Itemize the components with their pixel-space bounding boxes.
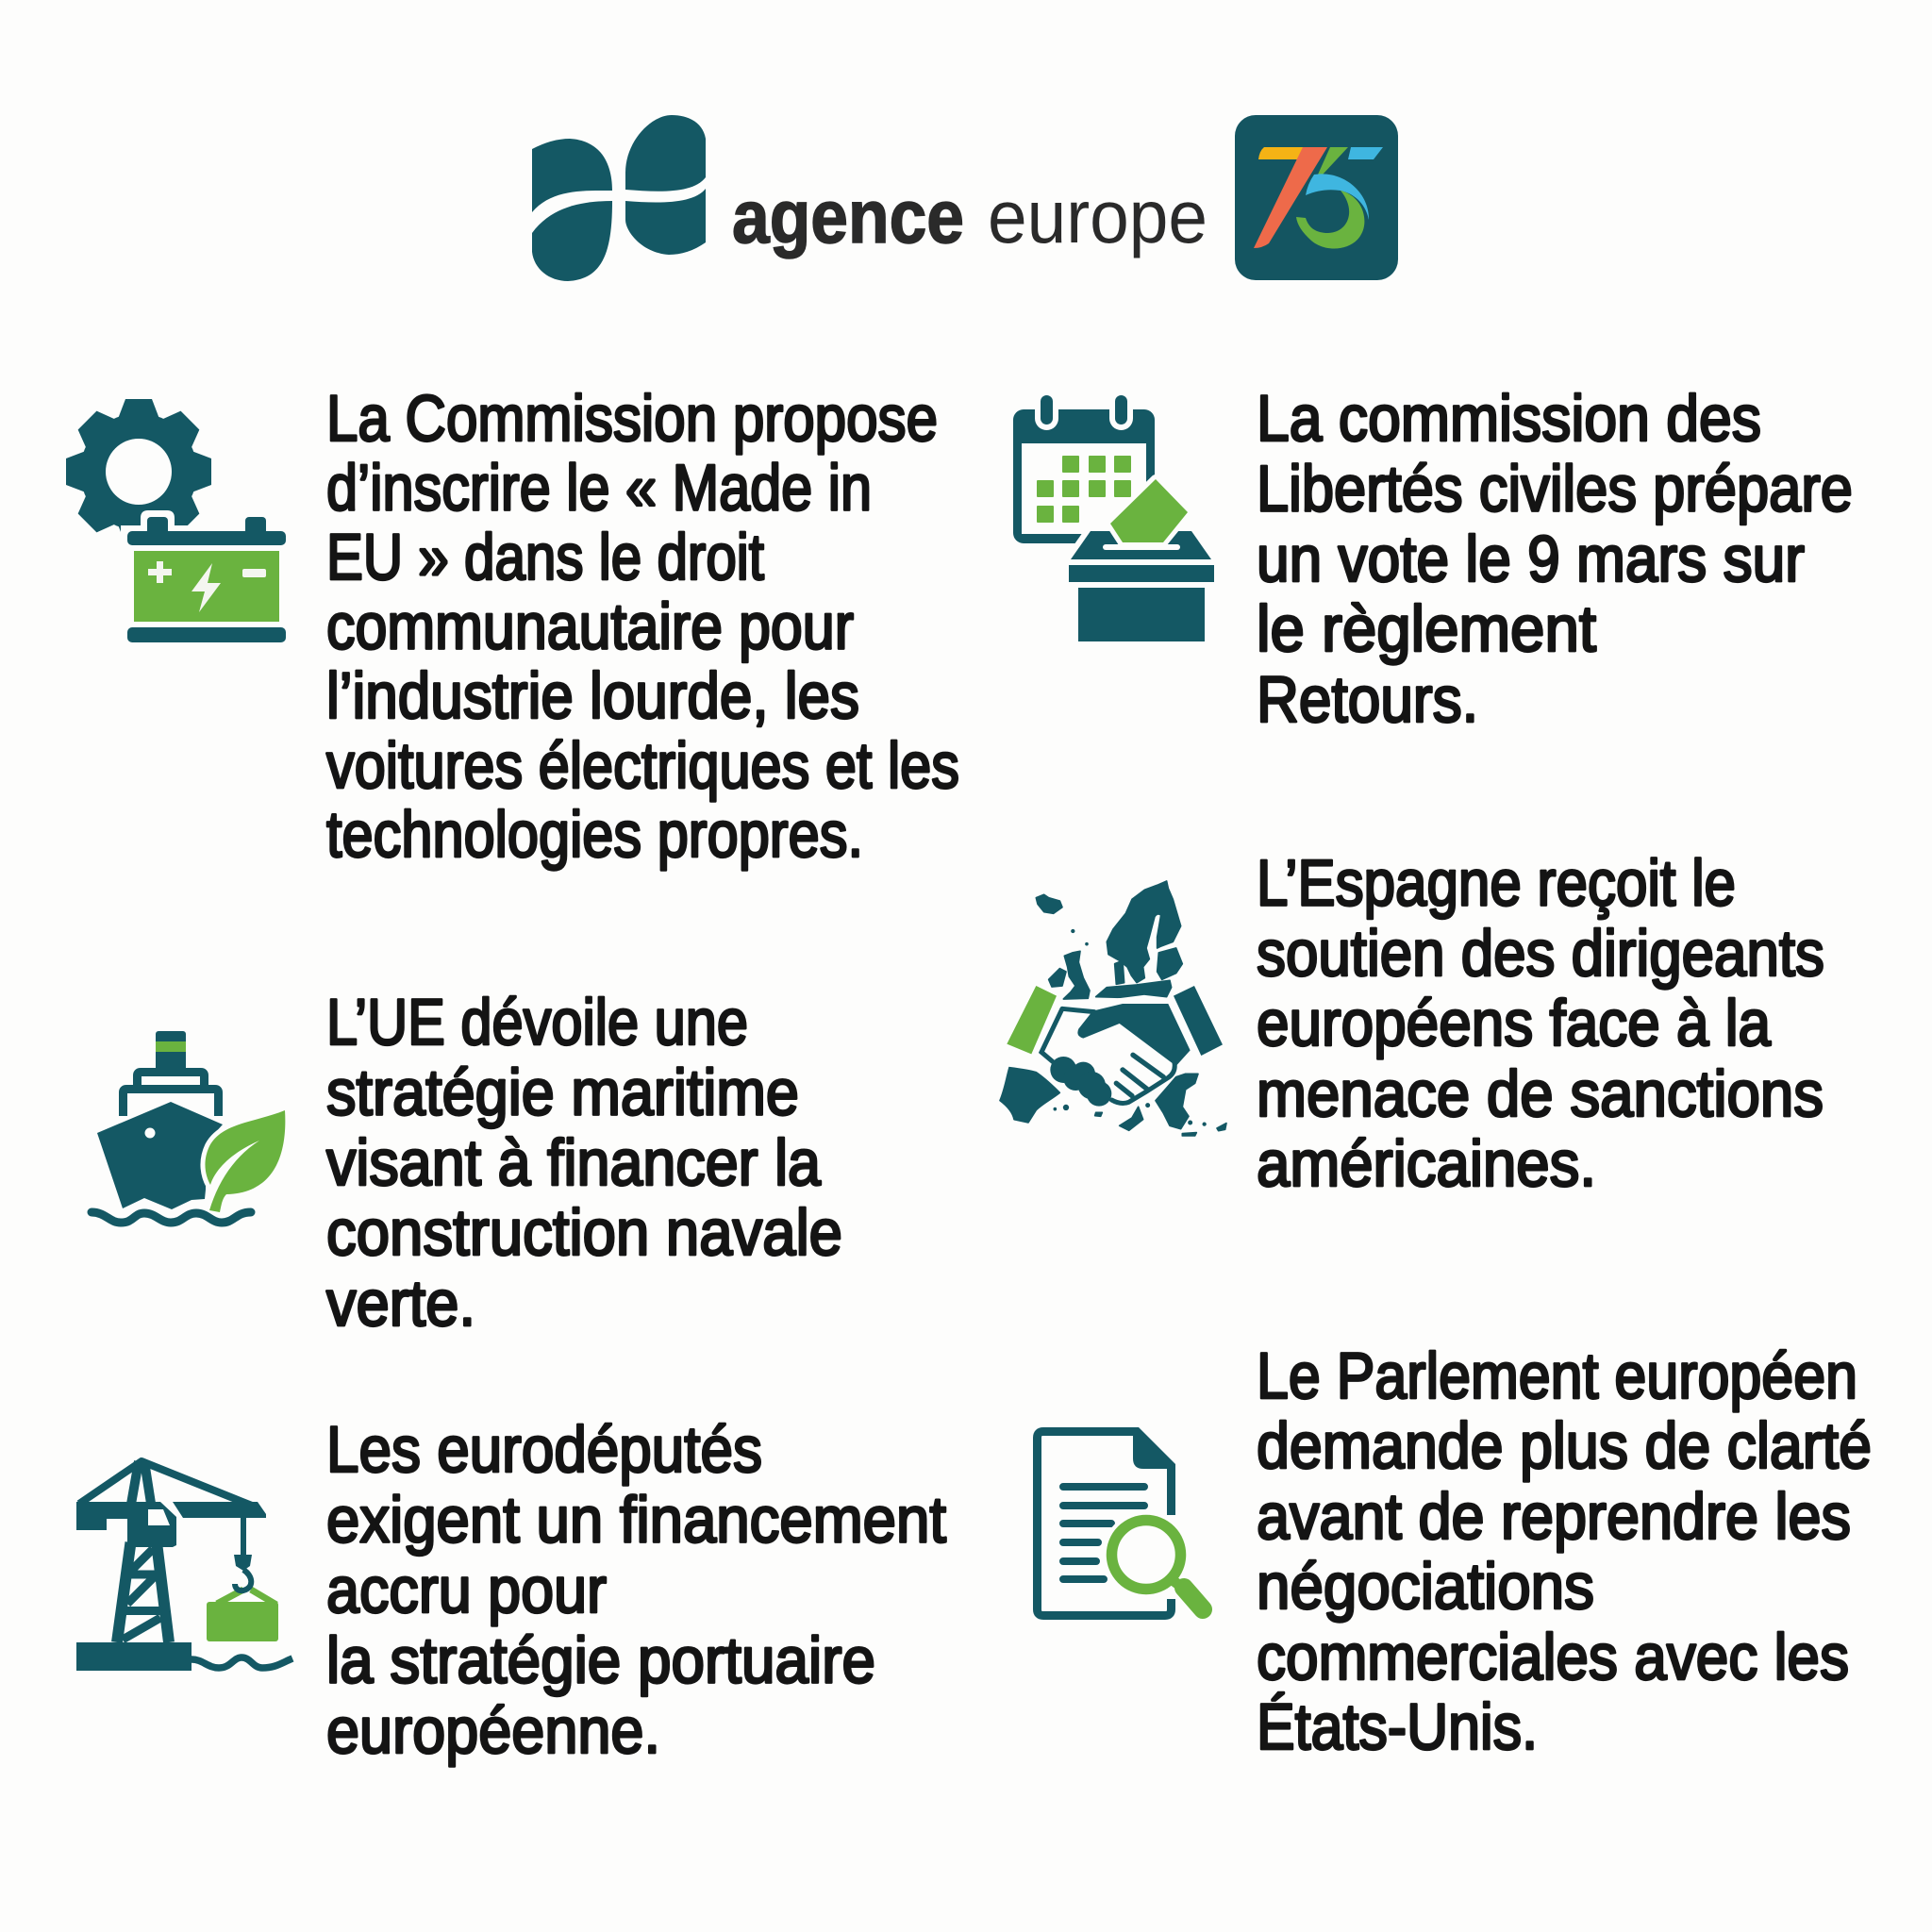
- text: EU-US trade talks: demande plus de clarté: [1257, 1409, 1872, 1482]
- text: EU-US trade talks: commerciales avec les: [1257, 1621, 1849, 1693]
- text: maritime strategy: [326, 986, 842, 1340]
- icon: Europe map with handshake: [1000, 881, 1226, 1136]
- ballot box: [1069, 479, 1214, 641]
- text: EU-US trade talks: avant de reprendre les: [1257, 1480, 1851, 1553]
- text: maritime strategy: L’UE dévoile une: [326, 986, 748, 1058]
- icon: calendar and ballot box: [1013, 390, 1214, 641]
- text: maritime strategy: construction navale: [326, 1196, 842, 1269]
- text: Made in EU: communautaire pour: [326, 591, 854, 662]
- text: maritime strategy: verte.: [326, 1267, 475, 1340]
- icon: document with magnifier: [1038, 1427, 1203, 1615]
- text: EU-US trade talks: [1257, 1340, 1872, 1763]
- text: port strategy: accru pour: [326, 1554, 607, 1626]
- 75th anniversary badge: [1235, 115, 1398, 280]
- logo mark: [532, 115, 706, 281]
- text: Made in EU: l’industrie lourde, les: [326, 659, 859, 732]
- text: port strategy: Les eurodéputés: [326, 1413, 762, 1486]
- text: Returns regulation vote: le règlement: [1257, 592, 1596, 665]
- wordmark: [732, 175, 1208, 258]
- gear: [66, 399, 211, 544]
- text: Spain support: soutien des dirigeants: [1257, 917, 1824, 990]
- map of Europe: [1000, 881, 1226, 1136]
- cuffs: [1007, 986, 1057, 1054]
- text: EU-US trade talks: Le Parlement européen: [1257, 1340, 1857, 1412]
- text: Spain support: américaines.: [1257, 1127, 1596, 1200]
- text: Made in EU: EU » dans le droit: [326, 521, 764, 593]
- calendar: [1013, 390, 1155, 543]
- clasped hands: [1040, 1002, 1191, 1107]
- header logo: [532, 115, 1398, 281]
- text: port strategy: exigent un financement: [326, 1484, 946, 1557]
- text: Returns regulation vote: un vote le 9 mars sur: [1257, 523, 1805, 595]
- icon: port crane: [76, 1461, 292, 1671]
- text: Returns regulation vote: Retours.: [1257, 663, 1478, 736]
- text: EU-US trade talks: États-Unis.: [1257, 1690, 1538, 1763]
- text: EU-US trade talks: négociations: [1257, 1550, 1594, 1623]
- text: Returns regulation vote: [1257, 382, 1853, 736]
- text: port strategy: européenne.: [326, 1694, 660, 1767]
- wordmark: agence: [732, 175, 964, 258]
- battery: [127, 517, 286, 642]
- text: Spain support: menace de sanctions: [1257, 1058, 1824, 1130]
- magnifier: [1111, 1521, 1203, 1609]
- text: maritime strategy: stratégie maritime: [326, 1057, 799, 1128]
- text: Made in EU: d’inscrire le « Made in: [326, 451, 872, 525]
- text: Spain support: L’Espagne reçoit le: [1257, 847, 1736, 919]
- text: Made in EU: technologies propres.: [326, 798, 863, 871]
- text: Made in EU: [326, 382, 959, 871]
- text: port strategy: la stratégie portuaire: [326, 1624, 875, 1696]
- text: Spain support: [1257, 847, 1824, 1200]
- text: maritime strategy: visant à financer la: [326, 1126, 822, 1199]
- text: Returns regulation vote: La commission des: [1257, 382, 1761, 455]
- text: Returns regulation vote: Libertés civiles prépare: [1257, 453, 1853, 525]
- text: Made in EU: voitures électriques et les: [326, 729, 959, 802]
- wordmark: europe: [988, 175, 1208, 258]
- document: [1038, 1427, 1175, 1615]
- icon: ship with leaf: [92, 1031, 285, 1223]
- text: Spain support: européens face à la: [1257, 987, 1772, 1059]
- text: Made in EU: La Commission propose: [326, 382, 938, 455]
- text: port strategy: [326, 1413, 946, 1767]
- icon: gear and battery: [66, 399, 292, 642]
